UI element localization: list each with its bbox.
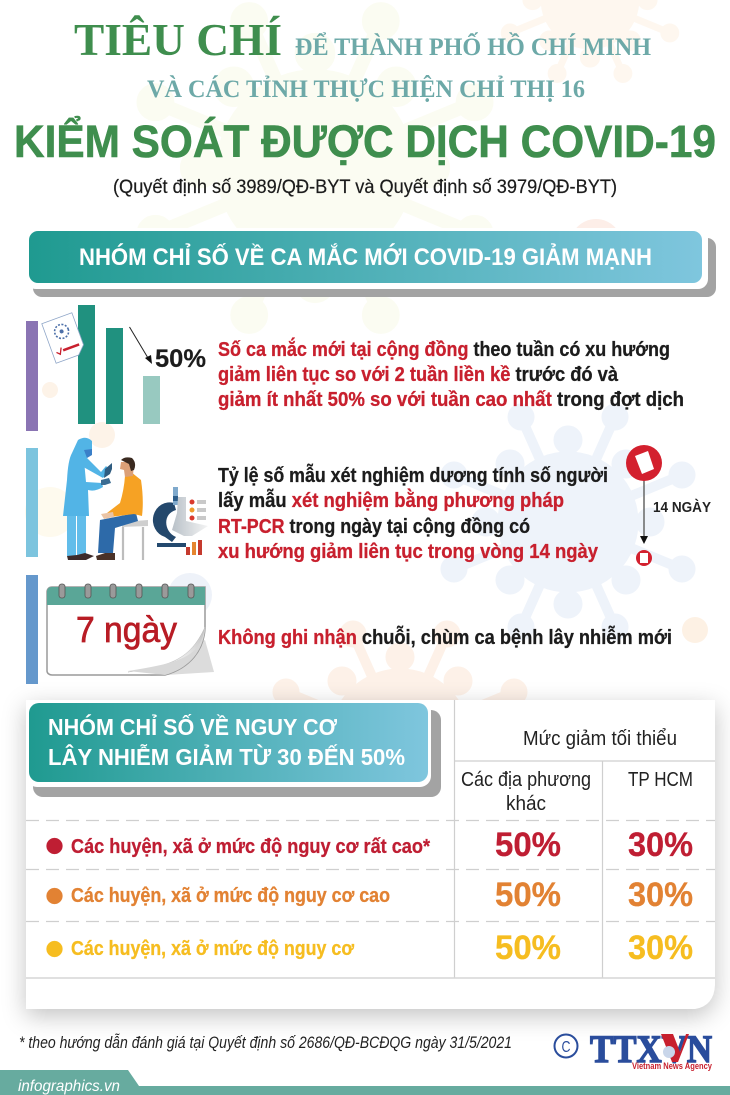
criterion 1 text: Số ca mắc mới tại cộng đồng theo tuần có xu hướng — [218, 337, 670, 361]
logo: TTXVN — [554, 1028, 713, 1072]
table card — [26, 700, 715, 1009]
row: high risk — [46, 876, 693, 914]
row: risk — [46, 929, 693, 967]
criterion 2 text: xu hướng giảm liên tục trong vòng 14 ngày — [218, 541, 599, 563]
table column headers: Các địa phương — [461, 769, 591, 791]
section banner: transmission risk — [26, 700, 441, 797]
timeline: 14 days: 14 NGÀY — [653, 499, 711, 516]
timeline: 14 days — [626, 445, 711, 566]
arrow down to 50% — [130, 327, 152, 364]
panel: risk table — [26, 700, 715, 1009]
row: risk: Các huyện, xã ở mức độ nguy cơ — [71, 938, 355, 960]
50% label: 50% — [155, 345, 206, 373]
title: tiêu chí line: TIÊU CHÍ — [74, 14, 282, 65]
row: very high risk — [46, 826, 693, 864]
criterion 2 text: lấy mẫu xét nghiệm bằng phương pháp — [218, 488, 564, 512]
table column headers — [461, 728, 693, 815]
icon: calendar 7 days — [47, 584, 214, 676]
footnote: * theo hướng dẫn đánh giá tại Quyết định số 2686/QĐ-BCĐQG ngày 31/5/2021 — [19, 1033, 512, 1052]
row: very high risk: Các huyện, xã ở mức độ nguy cơ rất cao* — [71, 836, 430, 858]
row: high risk: 30% — [628, 876, 693, 914]
row: risk: 30% — [628, 929, 693, 967]
accent strip blue — [26, 575, 38, 684]
table grid — [26, 700, 715, 978]
row: high risk: 50% — [495, 876, 561, 914]
logo: TTXVN: TTXVN — [590, 1028, 712, 1071]
subtitle: (Quyết định số 3989/QĐ-BYT và Quyết định số 3979/QĐ-BYT) — [113, 177, 617, 198]
row: very high risk: 30% — [628, 826, 693, 864]
icon: microscope and samples — [153, 487, 208, 555]
medic — [63, 438, 112, 560]
bar chart: falling cases — [78, 305, 160, 424]
title: tiêu chí line — [74, 14, 652, 65]
patient — [96, 457, 148, 560]
row: risk: 50% — [495, 929, 561, 967]
criterion 1 text: giảm liên tục so với 2 tuần liền kề trước đó và — [218, 364, 619, 386]
table column headers: TP HCM — [628, 769, 693, 791]
section banner: transmission risk: LÂY NHIỄM GIẢM TỪ 30 ĐẾN 50% — [48, 742, 405, 770]
criterion 2 text: RT-PCR trong ngày tại cộng đồng có — [218, 516, 530, 538]
accent strip purple — [26, 321, 38, 431]
panel: criterion 3 — [26, 575, 672, 684]
panel: criterion 1 — [26, 305, 684, 431]
icon: calendar 7 days: 7 ngày — [76, 609, 177, 650]
section banner: new cases — [26, 228, 716, 297]
section banner: transmission risk: NHÓM CHỈ SỐ VỀ NGUY CƠ — [48, 712, 337, 740]
row: high risk: Các huyện, xã ở mức độ nguy cơ cao — [71, 885, 390, 907]
criterion 2 text: Tỷ lệ số mẫu xét nghiệm dương tính số người — [218, 463, 608, 487]
accent strip light blue — [26, 448, 38, 557]
row: very high risk: 50% — [495, 826, 561, 864]
criterion 2 text — [218, 463, 608, 563]
title: second line: VÀ CÁC TỈNH THỰC HIỆN CHỈ THỊ 16 — [147, 75, 585, 103]
panel: criterion 2 — [26, 438, 711, 566]
footer band: infographics.vn — [18, 1078, 120, 1095]
logo: TTXVN: C — [562, 1039, 570, 1056]
table column headers: khác — [506, 793, 546, 815]
table column headers: Mức giảm tối thiểu — [523, 728, 677, 750]
logo: TTXVN: Vietnam News Agency — [632, 1061, 713, 1072]
criterion 3 text: Không ghi nhận chuỗi, chùm ca bệnh lây nhiễm mới — [218, 625, 672, 649]
footer band — [0, 1070, 730, 1095]
criterion 1 text — [218, 337, 684, 411]
title block — [14, 14, 716, 198]
title: tiêu chí line: ĐỂ THÀNH PHỐ HỒ CHÍ MINH — [295, 32, 652, 61]
criterion 1 text: giảm ít nhất 50% so với tuần cao nhất trong đợt dịch — [218, 389, 684, 411]
icon: test report — [42, 313, 86, 363]
section banner: new cases: NHÓM CHỈ SỐ VỀ CA MẮC MỚI COVID-19 GIẢM MẠNH — [79, 242, 652, 271]
icon: medic testing patient — [63, 438, 148, 560]
